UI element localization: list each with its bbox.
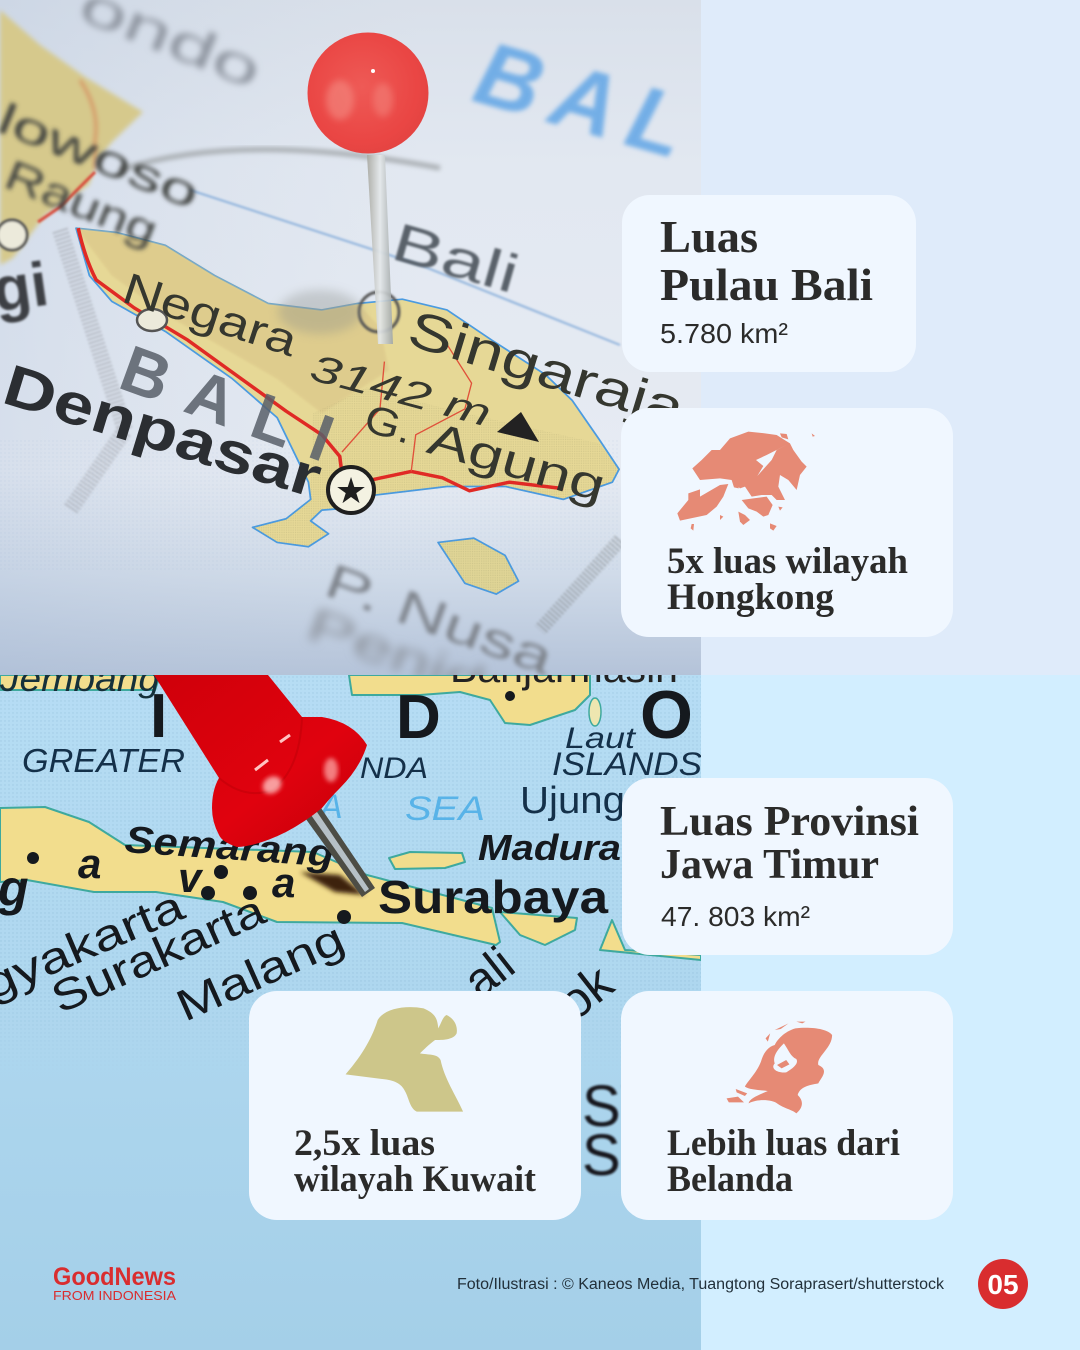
map labels: Surakarta — [44, 885, 273, 1023]
town markers: ★ — [335, 470, 367, 511]
text: 2,5x luas wilayah Kuwait: 2,5x luas — [294, 1123, 435, 1164]
heading: Luas Provinsi Jawa Timur: Luas Provinsi — [660, 799, 919, 845]
heading: Luas Pulau Bali: Pulau Bali — [660, 259, 873, 310]
page number badge — [978, 1259, 1028, 1309]
map labels: SS — [582, 1123, 659, 1188]
icon: Kuwait map — [346, 1007, 463, 1112]
map labels: P. Nusa — [318, 555, 560, 686]
Nusa Penida — [438, 538, 519, 594]
map labels: Agung — [422, 412, 612, 512]
blurred East Java land — [0, 10, 143, 265]
map labels: Negara — [117, 264, 304, 366]
photo: map of Bali with red pin — [0, 0, 710, 724]
red push pin — [154, 675, 367, 847]
map labels: A — [318, 788, 343, 826]
text: Lebih luas dari Belanda: Lebih luas dari — [667, 1123, 900, 1164]
map labels: Banjarmasin — [450, 645, 678, 691]
logo: GoodNews from Indonesia: GoodNews — [53, 1263, 176, 1291]
icon: Netherlands map — [727, 1022, 832, 1113]
map labels: Ujung — [520, 780, 625, 822]
map labels: O — [640, 677, 693, 753]
heading: Luas Provinsi Jawa Timur: Jawa Timur — [660, 842, 879, 888]
town markers — [137, 292, 539, 513]
icon: Hong Kong map — [677, 432, 815, 531]
map labels: v — [178, 854, 204, 901]
map labels: BALI — [111, 331, 364, 483]
map labels: Jembang — [0, 658, 160, 699]
needle — [303, 808, 375, 897]
land areas — [0, 675, 701, 960]
map labels: Semarang — [123, 819, 336, 876]
map labels: BAL — [464, 23, 710, 182]
map labels: Malang — [169, 914, 352, 1031]
card: Kuwait comparison — [249, 991, 581, 1220]
map labels: Bali — [386, 212, 525, 305]
map labels: Penida — [301, 598, 530, 724]
heading: Luas Pulau Bali: Luas — [660, 211, 758, 262]
card: Luas Pulau Bali — [622, 195, 916, 372]
text: Lebih luas dari Belanda: Belanda — [667, 1159, 793, 1200]
pin needle — [367, 155, 393, 344]
card: Belanda comparison — [621, 991, 953, 1220]
map labels — [0, 0, 710, 724]
map labels: Laut — [565, 722, 637, 755]
Bali island — [76, 228, 619, 547]
pin shadow — [278, 290, 362, 334]
map labels: GREATER — [22, 742, 185, 779]
card: Hongkong comparison — [621, 408, 953, 637]
value: area of East Java: 47. 803 km² — [661, 901, 810, 932]
map labels: D — [396, 683, 441, 752]
map labels: Surabaya — [378, 871, 608, 923]
map labels: 3142 m — [306, 347, 495, 436]
map labels: Raung — [0, 151, 165, 254]
map labels: ali — [454, 937, 525, 1009]
logo: GoodNews from Indonesia: FROM INDONESIA — [53, 1288, 176, 1303]
map labels: Denpasar — [0, 352, 329, 510]
map labels: I — [150, 682, 167, 751]
map labels: G. — [359, 397, 418, 453]
map labels: ok — [547, 953, 624, 1031]
photo credit: Foto/Ilustrasi : © Kaneos Media, Tuangtong Soraprasert/shutterstock — [457, 1276, 944, 1293]
map labels: Madura — [478, 827, 621, 868]
map labels — [0, 645, 702, 1188]
text: 2,5x luas wilayah Kuwait: wilayah Kuwait — [294, 1159, 537, 1200]
map labels: SEA — [405, 790, 485, 828]
map labels: a — [272, 859, 295, 906]
card: Luas Provinsi Jawa Timur — [622, 778, 953, 955]
text: 5x luas wilayah Hongkong: Hongkong — [667, 577, 835, 618]
map labels: NDA — [360, 752, 428, 785]
page number badge: 05 — [987, 1269, 1019, 1300]
value: area of Bali: 5.780 km² — [660, 318, 788, 349]
map labels: ISLANDS — [552, 746, 702, 782]
text: 5x luas wilayah Hongkong: 5x luas wilayah — [667, 541, 908, 582]
red roads — [78, 228, 563, 491]
photo: map of Java with red push pin — [0, 645, 702, 1350]
pin shadow on map — [300, 872, 365, 895]
red ball pin head — [308, 32, 428, 154]
background panels — [701, 0, 1080, 1350]
map labels: SY — [582, 1074, 659, 1139]
faint lines — [190, 190, 620, 345]
logo: GoodNews from Indonesia — [53, 1263, 176, 1303]
map labels: Singaraja — [401, 300, 691, 439]
map labels: a — [78, 840, 101, 887]
